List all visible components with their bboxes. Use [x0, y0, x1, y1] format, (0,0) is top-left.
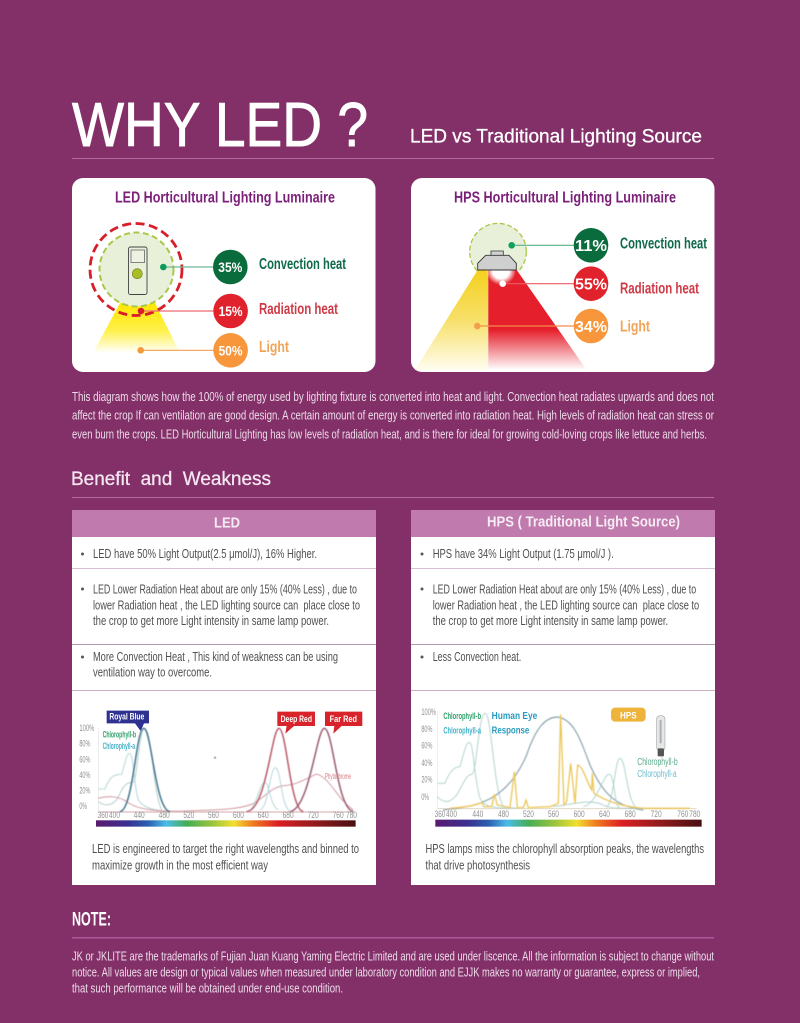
- icon: HPS bulb: [657, 716, 665, 756]
- LED bullet 2: the crop to get more Light intensity in same lamp power.: [93, 614, 329, 628]
- LED chart caption: maximize growth in the most efficient way: [92, 858, 269, 872]
- lamp with heat circles: [90, 224, 182, 316]
- panel: LED benefits: [72, 510, 376, 885]
- x axis labels: 560: [548, 809, 559, 819]
- callout: Royal Blue: [107, 711, 149, 731]
- lamp glow: [486, 257, 516, 285]
- stat: LED light 50%: 50%: [219, 343, 243, 358]
- y axis labels: 80%: [421, 724, 432, 734]
- callout: HPS: HPS: [620, 710, 637, 720]
- LED bullet 3: More Convection Heat , This kind of weakness can be using: [93, 650, 338, 664]
- callout: Deep Red: [277, 712, 315, 734]
- HPS bullet 3: [420, 650, 521, 664]
- stat: HPS light 34%: 34%: [575, 319, 607, 336]
- HPS bullet 3: Less Convection heat.: [433, 650, 521, 664]
- curve labels: [103, 730, 351, 781]
- y axis labels: 80%: [79, 739, 90, 749]
- callout: Far Red: Far Red: [330, 714, 357, 724]
- x axis labels: 720: [308, 810, 319, 820]
- stat: HPS radiation 55%: [499, 266, 699, 301]
- LED chart caption: [92, 842, 359, 872]
- curve labels: Chlorophyll-a: [103, 741, 135, 751]
- y axis labels: [421, 707, 436, 802]
- LED bullet 2: [81, 582, 360, 628]
- x axis labels: 640: [599, 809, 610, 819]
- HPS table header: [411, 510, 715, 537]
- panel heading: LED luminaire: LED Horticultural Lighting Luminaire: [115, 190, 335, 206]
- subtitle: LED vs Traditional Lighting Source: [410, 126, 702, 148]
- HPS bullet 2: LED Lower Radiation Heat about are only 15% (40% Less) , due to: [433, 582, 696, 596]
- spectrum curves: [437, 713, 690, 810]
- y axis labels: 40%: [421, 758, 432, 768]
- chart: LED spectrum: [79, 711, 362, 827]
- note text: [72, 950, 714, 996]
- HPS bullet 2: the crop to get more Light intensity in same lamp power.: [433, 614, 668, 628]
- HPS chart caption: that drive photosynthesis: [426, 858, 530, 872]
- curve labels: Chlorophyll-a: [443, 726, 481, 736]
- x axis labels: 780: [689, 809, 700, 819]
- y axis labels: 20%: [79, 786, 90, 796]
- stat: HPS convection 11%: [508, 228, 707, 263]
- LED table header: LED: [214, 516, 240, 532]
- y axis labels: 100%: [421, 707, 436, 717]
- note text: that such performance will be obtained under end-use condition.: [72, 982, 343, 996]
- callout: Far Red: [325, 712, 362, 734]
- x axis labels: 680: [625, 809, 636, 819]
- description paragraph: [72, 390, 714, 441]
- x axis labels: 780: [346, 810, 357, 820]
- stat: LED light 50%: Light: [259, 339, 289, 356]
- x axis labels: 360: [435, 809, 445, 819]
- x axis labels: [98, 810, 357, 820]
- y axis labels: [79, 723, 94, 811]
- curve labels: Chlorophyll-b: [443, 711, 481, 721]
- curve labels: Response: [492, 726, 530, 737]
- y axis labels: 60%: [79, 754, 90, 764]
- stat: HPS light 34%: Light: [620, 318, 650, 336]
- chart: HPS spectrum: [421, 707, 702, 827]
- stat: LED radiation 15%: [138, 294, 338, 328]
- x axis labels: 440: [134, 810, 145, 820]
- x axis labels: 600: [233, 810, 244, 820]
- x axis labels: 440: [472, 809, 483, 819]
- LED bullet 3: [81, 650, 338, 680]
- panel: HPS benefits: [411, 510, 715, 885]
- x axis labels: 640: [258, 810, 269, 820]
- stat: LED convection 35%: 35%: [218, 260, 242, 275]
- HPS table header: HPS ( Traditional Light Source): [487, 514, 680, 530]
- x axis labels: 400: [109, 810, 120, 820]
- LED bullet 3: ventilation way to overcome.: [93, 666, 212, 680]
- stat: HPS radiation 55%: 55%: [575, 276, 607, 294]
- y axis labels: 40%: [79, 770, 90, 780]
- LED chart caption: LED is engineered to target the right wavelengths and binned to: [92, 842, 359, 856]
- spectrum curves: [98, 728, 353, 812]
- x axis labels: 480: [498, 809, 509, 819]
- wavelength colour bar: [96, 820, 356, 827]
- x axis labels: 560: [208, 810, 219, 820]
- stat: LED convection 35%: Convection heat: [259, 256, 346, 273]
- curve labels: Human Eye: [492, 711, 538, 722]
- title: WHY LED ?: [72, 91, 368, 160]
- curve labels: Phytochrome: [325, 772, 351, 781]
- panel: LED luminaire: [72, 178, 376, 372]
- convection heat circle: [470, 223, 526, 280]
- HPS bullet 2: lower Radiation heat , the LED lighting source can place close to: [433, 598, 699, 612]
- stat: LED convection 35%: [160, 250, 346, 284]
- stat: LED light 50%: [137, 333, 289, 368]
- HPS bullet 1: HPS have 34% Light Output (1.75 μmol/J ).: [433, 547, 614, 561]
- yellow light beam: [415, 270, 488, 370]
- icon: HPS lamp: [478, 251, 516, 270]
- curve labels: [443, 711, 678, 780]
- HPS chart caption: [426, 842, 704, 872]
- callout: HPS: [611, 708, 646, 722]
- x axis labels: 360: [98, 810, 108, 820]
- HPS bullet 2: [420, 582, 699, 628]
- note heading: NOTE:: [72, 910, 111, 930]
- x axis labels: 480: [159, 810, 170, 820]
- LED bullet 1: LED have 50% Light Output(2.5 μmol/J), 16% Higher.: [93, 547, 317, 561]
- y axis labels: 0%: [79, 801, 87, 811]
- x axis labels: 760: [677, 809, 688, 819]
- yellow light beam: [93, 303, 180, 353]
- x axis labels: 400: [446, 809, 457, 819]
- curve labels: Chlorophyll-a: [637, 769, 677, 780]
- y axis labels: 60%: [421, 741, 432, 751]
- y axis labels: 100%: [79, 723, 94, 733]
- curve labels: Chlorophyll-b: [103, 730, 136, 740]
- y axis labels: 20%: [421, 775, 432, 785]
- HPS chart caption: HPS lamps miss the chlorophyll absorption peaks, the wavelengths: [426, 842, 704, 856]
- stat: LED radiation 15%: 15%: [219, 304, 243, 319]
- stat: HPS light 34%: [474, 309, 650, 343]
- LED bullet 2: lower Radiation heat , the LED lighting source can place close to: [93, 598, 360, 612]
- LED bullet 2: LED Lower Radiation Heat about are only 15% (40% Less) , due to: [93, 582, 357, 596]
- panel: HPS luminaire: [411, 178, 714, 372]
- y axis labels: 0%: [421, 792, 429, 802]
- x axis labels: 720: [651, 809, 662, 819]
- stat: HPS convection 11%: 11%: [575, 238, 607, 255]
- red radiation beam: [488, 270, 587, 370]
- curve labels: Chlorophyll-b: [637, 757, 678, 768]
- stat: HPS convection 11%: Convection heat: [620, 236, 707, 252]
- section heading: Benefit and Weakness: [71, 469, 271, 490]
- stat: HPS radiation 55%: Radiation heat: [620, 280, 699, 298]
- LED table header: [72, 510, 376, 537]
- x axis labels: [435, 809, 700, 819]
- x axis labels: 520: [523, 809, 534, 819]
- x axis labels: 680: [283, 810, 294, 820]
- panel heading: HPS luminaire: HPS Horticultural Lighting Luminaire: [454, 190, 676, 206]
- stat: LED radiation 15%: Radiation heat: [259, 301, 338, 318]
- callout: Deep Red: Deep Red: [281, 714, 312, 724]
- wavelength colour bar: [435, 820, 702, 827]
- x axis labels: 520: [183, 810, 194, 820]
- callout: Royal Blue: Royal Blue: [109, 712, 144, 722]
- x axis labels: 600: [574, 809, 585, 819]
- x axis labels: 760: [333, 810, 344, 820]
